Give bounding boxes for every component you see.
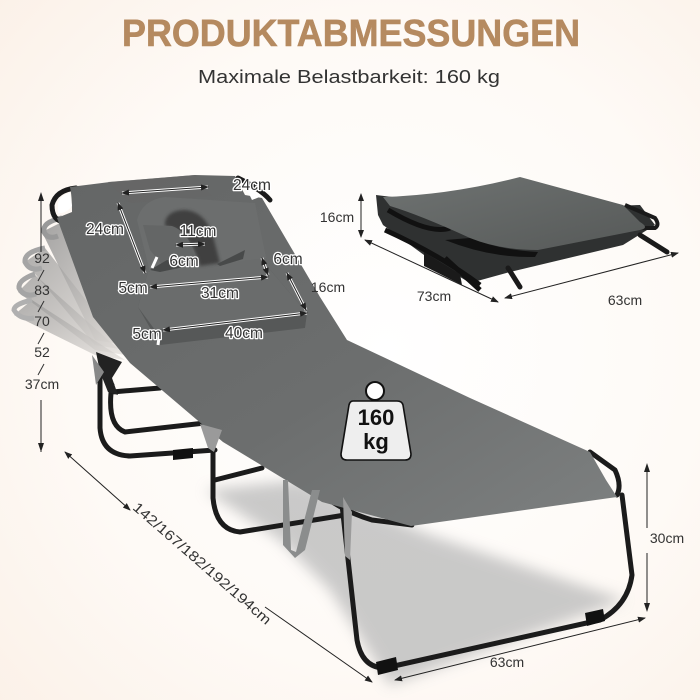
leg height dimension: 30cm bbox=[650, 530, 684, 546]
reclined backrest ghosts bbox=[14, 218, 125, 360]
label: 5cm lower: 5cm bbox=[132, 326, 162, 343]
backrest height labels: 52 bbox=[34, 344, 50, 360]
head frame bbox=[100, 372, 215, 456]
folded width arrow bbox=[505, 253, 678, 298]
subtitle: Maximale Belastbarkeit: 160 kg bbox=[198, 66, 500, 87]
folded depth arrow bbox=[360, 194, 362, 237]
backrest height labels bbox=[25, 250, 59, 392]
label: 5cm upper: 5cm bbox=[118, 280, 148, 297]
folded fabric bbox=[383, 177, 645, 250]
leg grips bbox=[173, 448, 605, 675]
label: 63cm: 63cm bbox=[608, 292, 642, 308]
weight icon: kg bbox=[363, 429, 389, 454]
label: 6cm left: 6cm bbox=[169, 253, 199, 270]
pillow dimensions bbox=[86, 177, 307, 345]
lounger legs bbox=[100, 372, 632, 675]
handle holes bbox=[58, 186, 262, 213]
weight icon: 160 bbox=[358, 405, 394, 430]
hinges bbox=[92, 352, 352, 560]
top tube handles bbox=[52, 178, 270, 222]
face pillow bbox=[137, 197, 307, 345]
label: 16cm cushion: 16cm bbox=[311, 279, 345, 295]
label: 40cm: 40cm bbox=[225, 325, 263, 342]
backrest height labels: 70 bbox=[34, 313, 50, 329]
backrest height labels: 83 bbox=[34, 282, 50, 298]
label: 73cm: 73cm bbox=[417, 288, 451, 304]
label: 24cm top: 24cm bbox=[233, 177, 271, 194]
folded length arrow bbox=[365, 240, 498, 302]
backrest height labels: 92 bbox=[34, 250, 50, 266]
title: PRODUKTABMESSUNGEN bbox=[122, 13, 580, 55]
folded frame bbox=[376, 195, 667, 290]
head panel bbox=[108, 175, 212, 203]
label: 6cm right: 6cm bbox=[273, 251, 303, 268]
backrest height arrow bbox=[38, 192, 44, 452]
foot width dimension bbox=[395, 618, 645, 680]
lounger fabric bbox=[57, 175, 617, 526]
floor shadow bbox=[205, 480, 625, 685]
leg height dimension bbox=[644, 463, 684, 612]
label: 11cm: 11cm bbox=[180, 223, 216, 240]
label: 16cm: 16cm bbox=[320, 209, 354, 225]
length dimension: 142/167/182/192/194cm bbox=[130, 499, 275, 628]
foot frame bbox=[342, 495, 632, 668]
backrest height labels: 37cm bbox=[25, 376, 59, 392]
folded lounger bbox=[320, 177, 678, 308]
middle frame bbox=[213, 440, 345, 532]
length dimension bbox=[65, 452, 372, 682]
label: 24cm side: 24cm bbox=[86, 221, 124, 238]
foot width dimension: 63cm bbox=[490, 654, 524, 670]
weight icon bbox=[341, 382, 411, 460]
label: 31cm: 31cm bbox=[201, 285, 239, 302]
